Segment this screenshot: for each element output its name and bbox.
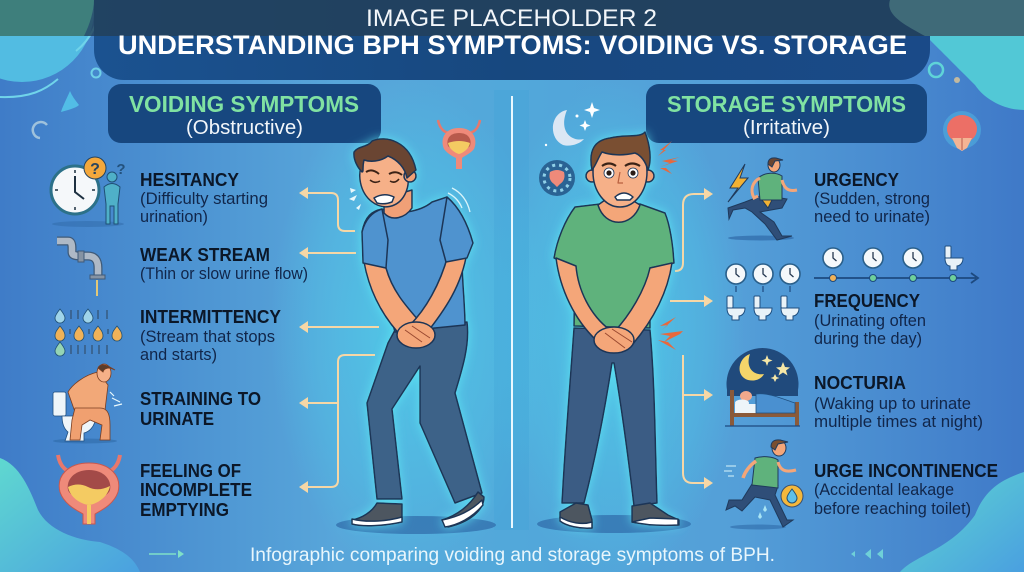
icon: man straining on toilet — [53, 364, 122, 444]
title line 1: IMAGE PLACEHOLDER 2 — [366, 5, 657, 32]
icon: bladder (incomplete emptying) — [58, 455, 120, 524]
arrow: footer right — [851, 549, 883, 559]
text: incomplete emptying: INCOMPLETE — [140, 480, 252, 500]
icon: clock and person (hesitancy): ? — [116, 161, 126, 178]
icon: moon and stars — [545, 102, 600, 146]
text: urgency: (Sudden, strong — [814, 190, 930, 208]
text: nocturia: multiple times at night) — [814, 413, 983, 431]
figure: man with storage symptoms — [537, 132, 691, 533]
icon: running man with leak (urge incontinence) — [724, 440, 803, 530]
icon: small bladder — [438, 120, 480, 169]
icon: drops (intermittency) — [55, 309, 122, 356]
caption: Infographic comparing voiding and storage symptoms of BPH. — [250, 545, 775, 566]
text: weak stream — [140, 245, 308, 283]
icon: clock and person (hesitancy) — [51, 157, 126, 227]
text: weak stream: (Thin or slow urine flow) — [140, 265, 308, 283]
text: incomplete emptying: FEELING OF — [140, 461, 241, 481]
icon: clocks and toilets (frequency) — [726, 264, 800, 320]
text: frequency: (Urinating often — [814, 312, 926, 330]
text: urgency: need to urinate) — [814, 208, 930, 226]
text: weak stream: WEAK STREAM — [140, 245, 270, 265]
text: urge incontinence: before reaching toilet) — [814, 500, 971, 518]
text: frequency: FREQUENCY — [814, 291, 920, 311]
arrows: storage connectors — [670, 188, 713, 489]
text: incomplete emptying: EMPTYING — [140, 500, 229, 520]
icon: prostate right — [943, 111, 981, 151]
icon: prostate badge — [539, 160, 575, 196]
icon: nerve pain bolts top — [658, 141, 680, 174]
text: nocturia: (Waking up to urinate — [814, 395, 971, 413]
text: intermittency: (Stream that stops — [140, 328, 275, 346]
decorative ring and dot — [929, 63, 960, 83]
title line 2: UNDERSTANDING BPH SYMPTOMS: VOIDING VS. STORAGE — [118, 30, 907, 60]
text: intermittency: and starts) — [140, 346, 217, 364]
text: urge incontinence: (Accidental leakage — [814, 481, 954, 499]
text: straining to urinate — [140, 389, 261, 429]
panel: storage header — [646, 84, 927, 143]
icon: clock and person (hesitancy): ? — [90, 161, 100, 178]
text: urge incontinence — [814, 461, 998, 518]
voiding heading: VOIDING SYMPTOMS — [129, 91, 359, 117]
text: hesitancy: (Difficulty starting — [140, 190, 268, 208]
decorative blob: bottom right — [900, 472, 1024, 572]
text: incomplete emptying — [140, 461, 252, 520]
icon: running man with lightning (urgency) — [728, 158, 797, 240]
text: intermittency: INTERMITTENCY — [140, 307, 281, 327]
storage heading: STORAGE SYMPTOMS — [667, 91, 906, 117]
text: frequency — [814, 291, 926, 348]
text: intermittency — [140, 307, 281, 364]
text: straining to urinate: STRAINING TO — [140, 389, 261, 409]
title banner — [0, 0, 1024, 80]
figure: man with voiding symptoms — [336, 139, 496, 534]
text: straining to urinate: URINATE — [140, 409, 214, 429]
icon: nerve pain bolts bottom — [658, 317, 683, 350]
text: hesitancy — [140, 170, 268, 226]
text: hesitancy: HESITANCY — [140, 170, 239, 190]
voiding subheading: (Obstructive) — [186, 117, 303, 139]
icon: night bed (nocturia) — [725, 348, 800, 426]
text: nocturia: NOCTURIA — [814, 373, 906, 393]
decorative blob: bottom left — [0, 458, 140, 572]
decorative blob: top left — [0, 0, 100, 138]
panel: voiding header — [108, 84, 381, 143]
arrows: voiding connectors — [299, 187, 379, 493]
text: urge incontinence: URGE INCONTINENCE — [814, 461, 998, 481]
text: frequency: during the day) — [814, 330, 922, 348]
icon: leaky pipe — [57, 241, 105, 296]
text: hesitancy: urination) — [140, 208, 208, 226]
text: urgency: URGENCY — [814, 170, 899, 190]
storage subheading: (Irritative) — [743, 117, 830, 139]
decorative blob: top right — [889, 0, 1024, 110]
text: urgency — [814, 170, 930, 226]
arrow: footer left — [149, 550, 184, 558]
icon: frequency timeline — [814, 246, 978, 283]
center divider — [511, 96, 513, 528]
text: nocturia — [814, 373, 983, 431]
